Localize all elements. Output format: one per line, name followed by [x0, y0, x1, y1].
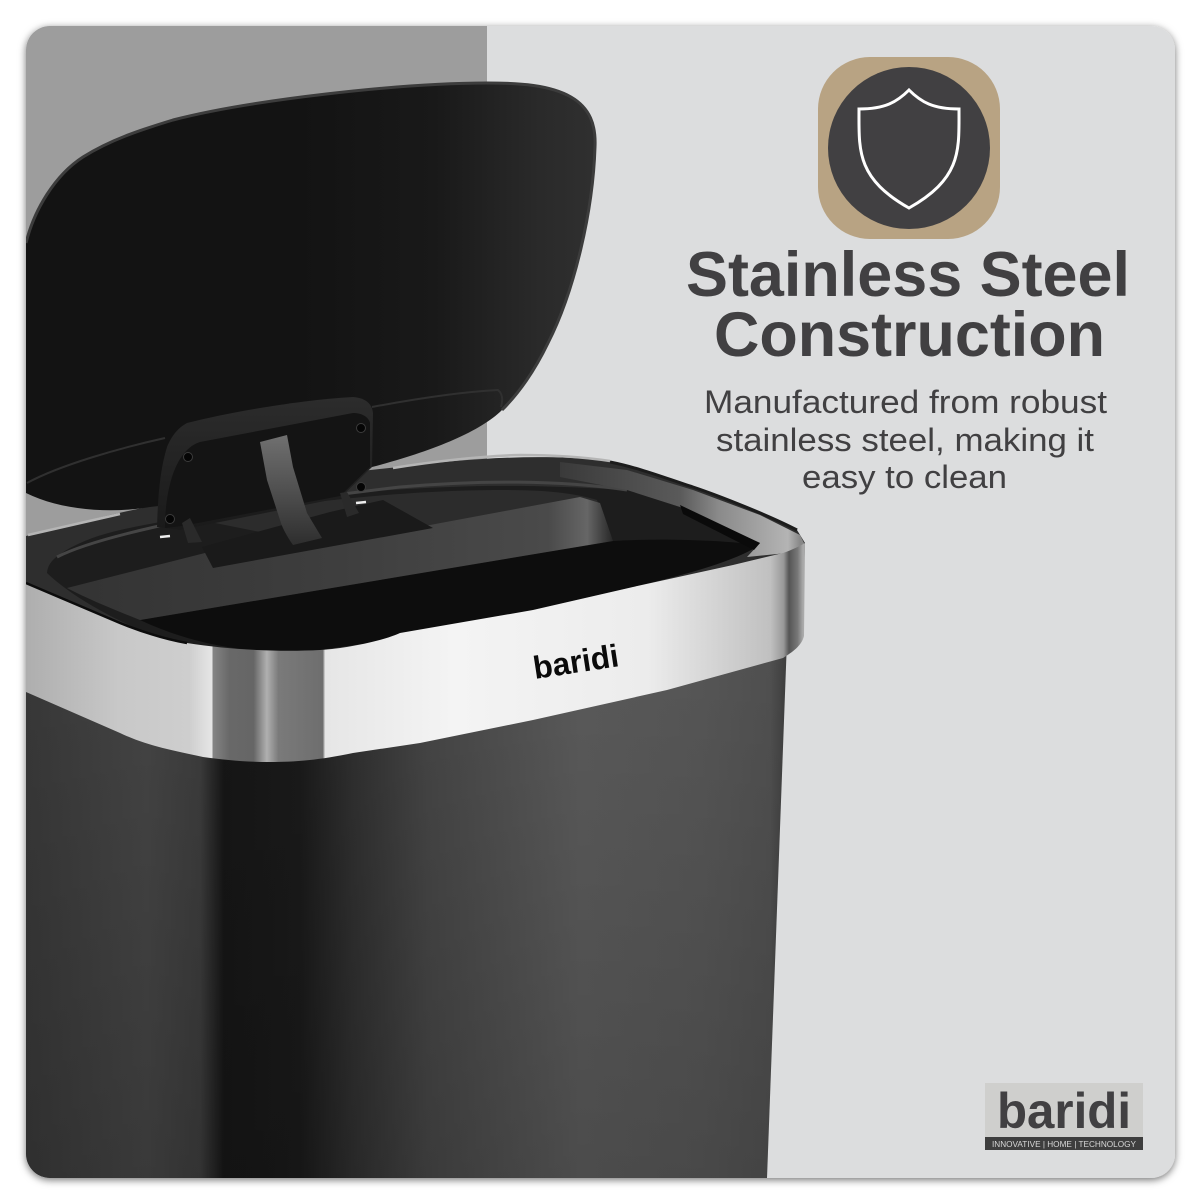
textured plate — [67, 497, 613, 620]
hinge base — [202, 500, 433, 568]
description text — [704, 384, 1107, 495]
heading: Construction — [714, 300, 1105, 370]
back rim and interior — [26, 454, 805, 651]
inner ledge line — [57, 482, 627, 557]
rim top highlight — [28, 455, 610, 535]
hinge plate — [157, 397, 433, 568]
brand mark on rim: baridi — [531, 637, 621, 686]
open lid — [26, 83, 595, 510]
lid inner lip — [27, 390, 502, 483]
rim top surface right corner — [560, 462, 805, 557]
logo tagline: INNOVATIVE | HOME | TECHNOLOGY — [992, 1140, 1137, 1149]
description text: stainless steel, making it — [716, 422, 1094, 458]
brand logo — [985, 1083, 1143, 1150]
hinge glints — [160, 502, 366, 537]
black lower cavity — [140, 540, 760, 651]
shield outline — [859, 90, 959, 208]
back wall — [216, 490, 598, 532]
dark backdrop block — [26, 26, 487, 586]
product photo: bin — [26, 83, 805, 1178]
rim top shadow line — [26, 583, 187, 643]
hinge screws — [184, 452, 192, 462]
inner cavity — [47, 486, 760, 652]
description text: Manufactured from robust — [704, 384, 1107, 420]
icon circle — [828, 67, 990, 229]
description text: easy to clean — [802, 459, 1007, 495]
heading: Stainless Steel — [686, 240, 1130, 310]
hinge plate inner face — [165, 413, 370, 528]
side struts — [182, 518, 202, 543]
feature icon: shield — [818, 57, 1000, 239]
centre strut — [260, 435, 322, 545]
bin body — [26, 640, 787, 1178]
icon tile — [818, 57, 1000, 239]
heading — [686, 240, 1130, 370]
stainless steel rim band — [26, 543, 805, 762]
lid edge highlight — [26, 83, 595, 410]
rim outer dark edge — [610, 462, 797, 530]
logo wordmark: baridi — [997, 1083, 1131, 1139]
black strip under tab — [680, 505, 760, 550]
